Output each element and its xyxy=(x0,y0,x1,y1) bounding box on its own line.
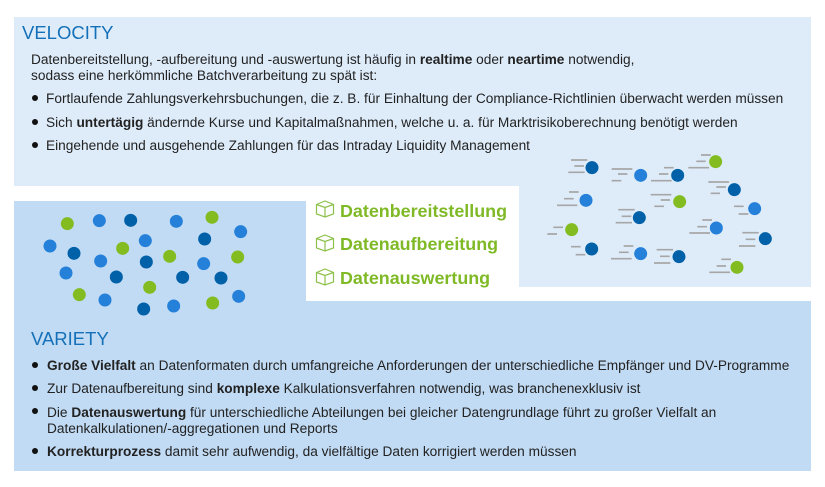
panel: variety xyxy=(14,301,811,471)
label: Datenaufbereitung: Datenaufbereitung xyxy=(340,234,498,254)
list: velocity bullets: Eingehende und ausgehende Zahlungen für das Intraday Liquidity Management xyxy=(46,138,530,153)
text block: velocity intro: Datenbereitstellung, -aufbereitung und -auswertung ist häufig in realtime oder neartime notwendig, xyxy=(31,52,634,67)
chart: scattered data points xyxy=(44,210,248,316)
list: variety bullets xyxy=(32,358,789,459)
icon: cube 3 xyxy=(316,268,334,286)
list: variety bullets: Zur Datenaufbereitung sind komplexe Kalkulationsverfahren notwendig, was branchenexklusiv ist xyxy=(47,381,640,396)
list: variety bullets: Korrekturprozess damit sehr aufwendig, da vielfältige Daten korrigiert werden müssen xyxy=(47,444,577,459)
heading: velocity: VELOCITY xyxy=(22,22,114,43)
list: variety bullets: Datenkalkulationen/-aggregationen und Reports xyxy=(47,421,338,436)
list: velocity bullets: Sich untertägig ändernde Kurse und Kapitalmaßnahmen, welche u. a. für Marktrisikoberechnung benötigt werden xyxy=(46,115,738,130)
label: Datenauswertung: Datenauswertung xyxy=(340,268,490,288)
list: variety bullets: Die Datenauswertung für unterschiedliche Abteilungen bei gleicher Datengrundlage führt zu großer Vielfalt an xyxy=(47,405,716,420)
panel: velocity illustration background xyxy=(519,186,811,287)
icon: cube 2 xyxy=(316,234,334,252)
list: velocity bullets: Fortlaufende Zahlungsverkehrsbuchungen, die z. B. für Einhaltung der Compliance-Richtlinien überwacht werden müssen xyxy=(46,91,783,106)
icon: cube 1 xyxy=(316,200,334,218)
heading: variety: VARIETY xyxy=(31,328,109,349)
chart: moving data points xyxy=(547,154,772,274)
list: velocity bullets xyxy=(32,91,783,153)
label: Datenbereitstellung: Datenbereitstellung xyxy=(340,201,507,221)
text block: velocity intro xyxy=(31,52,634,83)
list: variety bullets: Große Vielfalt an Datenformaten durch umfangreiche Anforderungen der unterschiedliche Empfänger und DV-Programme xyxy=(47,358,789,373)
panel: velocity xyxy=(14,17,811,186)
text block: velocity intro: sodass eine herkömmliche Batchverarbeitung zu spät ist: xyxy=(31,68,377,83)
panel: variety illustration background xyxy=(14,201,306,301)
